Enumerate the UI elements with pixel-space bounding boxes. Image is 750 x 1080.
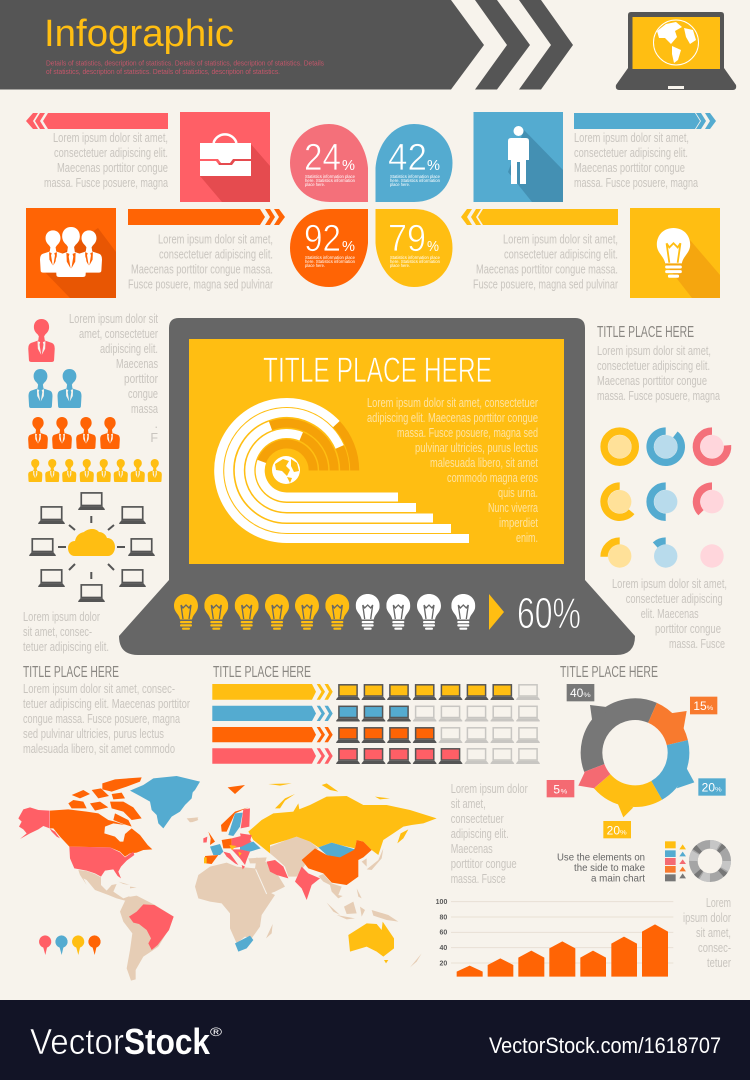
text: pink paragraph: consectetuer adipiscing elit. [54,146,168,160]
panel: blue stat row [474,112,716,202]
chart: arrow bars with laptop counts [212,684,540,764]
text: screen paragraph: adipiscing elit. Maecenas porttitor congue [367,411,538,425]
text: lower right paragraph: massa. Fusce [669,637,725,651]
text: orange paragraph [128,232,273,292]
chart: small progress donuts [604,431,728,568]
text: bar chart caption: sit amet, [696,926,731,940]
petal: 42%: place here. [390,182,410,187]
footer bar [0,1000,750,1080]
label: 40% [567,684,594,701]
petal: 24%: % [342,157,355,174]
row: pink [212,748,540,764]
text: left column paragraph: Lorem ipsum dolor sit [69,312,158,326]
text: orange paragraph: consectetuer adipiscing elit. [159,248,273,262]
text: screen paragraph: Nunc viverra [488,501,538,515]
footer logo: Stock [124,1021,211,1062]
axis labels: 20 [440,960,447,967]
footer logo: Vector [30,1021,124,1062]
text: bar chart caption [683,896,731,970]
footer logo: ® [210,1025,222,1039]
icon tile: team [26,208,116,298]
icon tile: briefcase [180,112,270,202]
icon tile: person [474,112,563,202]
region: Americas [18,776,200,981]
text: chart instruction: Use the elements on [557,852,645,864]
label: 20% blue: 20 [702,781,715,795]
text: screen paragraph: pulvinar ultricies, purus lectus [415,441,538,455]
icons: connected laptops [29,493,155,602]
petal: 42%: here. Statistics information [390,178,441,183]
text: screen paragraph: imperdiet [499,516,538,530]
footer logo [30,1021,222,1062]
bars [457,924,668,977]
text: blue paragraph: massa. Fusce posuere, magna [574,176,698,190]
petal: 24%: place here. [305,182,325,187]
text: screen paragraph: quis urna. [498,486,538,500]
petal: 79%: here. Statistics information [390,259,441,264]
text: chart instruction [557,852,645,884]
text: yellow paragraph: consectetuer adipiscing elit. [504,248,618,262]
petal: 24%: 24 [304,137,341,179]
text: cloud caption: Lorem ipsum dolor [23,610,100,624]
axis labels [436,899,447,967]
text: screen paragraph: malesuada libero, sit amet [430,456,538,470]
header banner [0,0,573,90]
icons: pink person [28,319,55,362]
label: 5%: 5 [553,782,560,796]
axis labels: 100 [436,899,447,906]
petal: 79%: 79 [388,218,426,260]
heading: laptop bars: TITLE PLACE HERE [213,664,311,681]
text: lower left title and paragraph: tetuer adipiscing elit. Maecenas porttitor [23,697,190,711]
text: screen paragraph: commodo magna eros [447,471,538,485]
text: yellow paragraph: Lorem ipsum dolor sit amet, [503,232,618,246]
text: lower left title and paragraph: TITLE PLACE HERE [23,664,119,681]
chart: orange bar chart [436,899,673,977]
petal: 42%: Statistics information place [390,174,441,179]
text: lower right paragraph [612,577,727,651]
stat: 60%: 60% [517,589,581,638]
petal: 24% [290,124,368,202]
text: screen paragraph: Lorem ipsum dolor sit amet, consectetuer [367,396,538,410]
icon: grey ring [693,844,727,878]
text: screen paragraph: massa. Fusce posuere, magna sed [397,426,538,440]
panel: pink stat row [26,112,270,202]
petal: 42% [376,124,452,202]
text: pink paragraph: Lorem ipsum dolor sit amet, [53,131,168,145]
icons: orange people [28,417,120,449]
icons: blue people [28,369,82,408]
petal: 92% [290,209,368,287]
text: left column paragraph: amet, consectetuer [79,327,158,341]
text: bar chart caption: consec- [698,941,731,955]
text: right column title and paragraph [597,324,720,403]
petal: 79%: % [427,238,439,255]
text: cloud caption: tetuer adipiscing elit. [23,640,109,654]
text: map paragraph: Lorem ipsum dolor [451,782,528,796]
panel: yellow stat row [461,208,720,298]
panel: orange stat row [26,208,285,298]
text: pink paragraph: Maecenas porttitor congue [57,161,168,175]
text: cloud caption [23,610,109,654]
text: orange paragraph: Maecenas porttitor congue massa. [131,262,273,276]
text: pink paragraph [44,131,168,190]
text: right column title and paragraph: consectetuer adipiscing elit. [597,359,710,373]
text: orange paragraph: Fusce posuere, magna sed pulvinar [128,278,273,292]
icons: yellow people [28,459,162,482]
row: blue [212,706,540,722]
text: lower left title and paragraph [23,664,190,756]
petal: 92%: place here. [305,263,325,268]
text: left column paragraph: porttitor [124,372,158,386]
axis labels: 60 [440,930,447,937]
row: yellow [212,684,540,700]
label: 40%: % [583,693,592,699]
label: 5% [547,780,574,797]
text: lower left title and paragraph: sed pulvinar ultricies, purus lectus [23,727,164,741]
label: 20% blue [698,778,726,796]
label: 20% blue: % [715,788,723,794]
petal: 24%: Statistics information place [305,174,356,179]
heading: donut chart: TITLE PLACE HERE [560,664,658,681]
text: map paragraph: sit amet, [451,797,486,811]
text: chart instruction: a main chart [591,872,645,884]
region: Europe Africa Asia Australia [190,782,437,967]
text: left column paragraph [69,312,158,445]
laptop screen [189,339,564,564]
text: screen paragraph [367,396,538,545]
text: blue paragraph: Lorem ipsum dolor sit amet, [574,131,689,145]
text: left column paragraph: . [155,417,158,431]
petal: 92%: here. Statistics information [305,259,356,264]
text: map paragraph: Maecenas [451,842,493,856]
petal: 92%: Statistics information place [305,255,356,260]
icon: header laptop with globe [616,12,736,90]
petal: 79%: Statistics information place [390,255,441,260]
label: 5%: % [561,789,568,795]
text: bar chart caption: ipsum dolor [683,911,731,925]
text: map paragraph: adipiscing elit. [451,827,509,841]
subtitle: Details of statistics, description of statistics. Details of statistics, description of statistics. Details [46,58,324,68]
text: map paragraph [451,782,528,886]
axis labels: 80 [440,914,447,921]
text: orange paragraph: Lorem ipsum dolor sit amet, [158,232,273,246]
map: world [18,776,437,981]
icon: cloud [68,529,115,556]
label: 20% yellow: 20 [607,823,620,837]
panel: large laptop [119,318,635,655]
text: cloud caption: sit amet, consec- [23,625,92,639]
petal: 79% [376,209,452,287]
text: left column paragraph: adipiscing elit. [100,342,158,356]
text: left column paragraph: massa [131,402,158,416]
chart: spiral arcs [219,402,469,538]
icon: globe [272,456,300,484]
icon tile: light bulb [630,208,720,298]
arrow bar: blue [574,113,716,129]
cloud network diagram [29,493,155,602]
arrow bar: orange [128,209,285,225]
footer url: VectorStock.com/1618707 [489,1033,721,1058]
text: bar chart caption: Lorem [706,896,731,910]
label: 40%: 40 [570,686,584,700]
petal: 79%: place here. [390,263,410,268]
label: 20% yellow [603,821,631,838]
chart: segmented donut [547,684,726,838]
subtitle [46,58,324,76]
petal: 42%: 42 [388,137,427,179]
text: right column title and paragraph: Lorem ipsum dolor sit amet, [597,344,711,358]
row: orange [212,727,540,743]
petal: 92%: % [342,238,355,255]
text: lower left title and paragraph: Lorem ipsum dolor sit amet, consec- [23,682,175,696]
text: map paragraph: consectetuer [451,812,504,826]
icons: map pins [39,935,101,955]
text: yellow paragraph: Maecenas porttitor congue massa. [476,262,618,276]
label: 15%: 15 [693,699,707,713]
text: bar chart caption: tetuer [707,956,731,970]
text: map paragraph: massa. Fusce [451,872,506,886]
text: right column title and paragraph: TITLE PLACE HERE [597,324,694,341]
text: lower left title and paragraph: congue massa. Fusce posuere, magna [23,712,180,726]
petal: 24%: here. Statistics information [305,178,356,183]
text: blue paragraph [574,131,698,190]
text: yellow paragraph [473,232,618,292]
text: right column title and paragraph: Maecenas porttitor congue [597,374,707,388]
people pictogram rows [28,319,162,482]
arrow: yellow pointer [489,594,504,630]
label: 15%: % [707,706,714,712]
screen title: TITLE PLACE HERE [263,351,492,390]
text: chart instruction: the side to make [574,862,645,874]
title: Infographic [44,13,234,55]
text: blue paragraph: Maecenas porttitor congue [574,161,685,175]
text: left column paragraph: F [150,431,158,445]
text: lower right paragraph: porttitor congue [655,622,721,636]
subtitle: of statistics, description of statistics. Details of statistics, description of statistics. [46,67,280,76]
text: screen paragraph: enim. [516,531,538,545]
legend swatches [665,841,686,881]
text: map paragraph: porttitor congue [451,857,517,871]
petal: 42%: % [427,157,440,174]
text: left column paragraph: Maecenas [116,357,158,371]
arrow bar: yellow [461,209,618,225]
petal: 92%: 92 [304,218,341,260]
icons: light bulbs 60 percent [174,594,475,630]
text: left column paragraph: congue [128,387,158,401]
text: lower right paragraph: elit. Maecenas [641,607,699,621]
label: 15% [690,697,717,714]
label: 20% yellow: % [620,830,628,836]
text: pink paragraph: massa. Fusce posuere, magna [44,176,168,190]
arrow bar: pink [26,113,168,129]
text: lower left title and paragraph: malesuada libero, sit amet commodo [23,742,175,756]
text: yellow paragraph: Fusce posuere, magna sed pulvinar [473,278,618,292]
axis labels: 40 [440,945,447,952]
text: blue paragraph: consectetuer adipiscing elit. [574,146,688,160]
